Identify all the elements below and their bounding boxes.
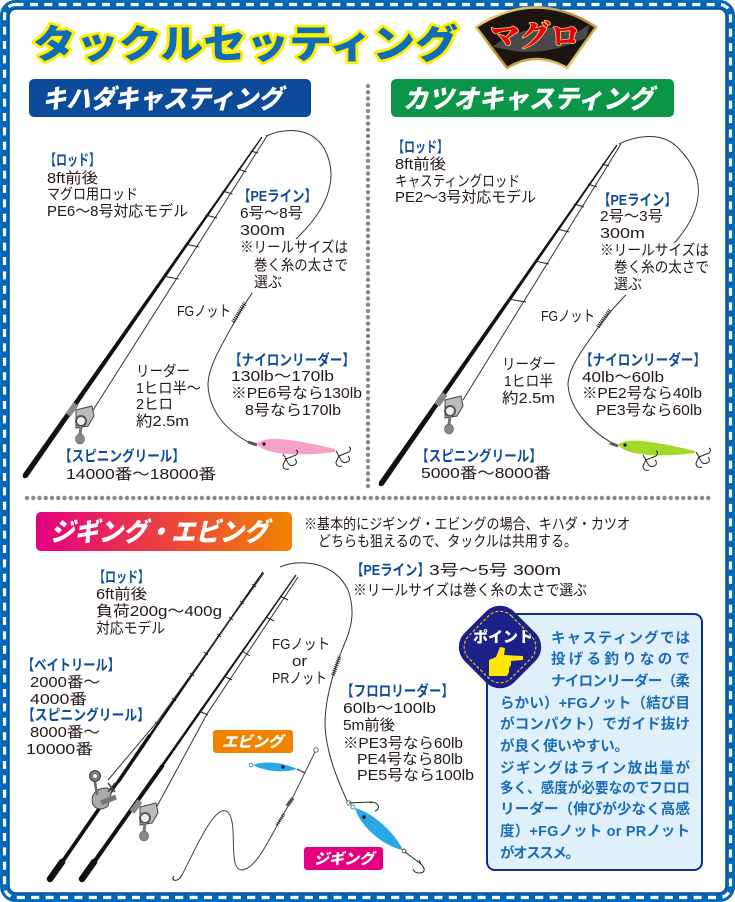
panel: point callout — [451, 598, 702, 870]
text: reels: 【ベイトリール】 — [22, 657, 120, 674]
text: rod — [45, 152, 188, 220]
text: PE line: 300m — [240, 222, 285, 239]
white mask behind PE text — [598, 243, 711, 295]
text: leader: 約2.5m — [136, 413, 189, 430]
text: PE line: 巻く糸の太さで — [254, 257, 348, 274]
text: PE line: 巻く糸の太さで — [614, 259, 709, 276]
lure: pink — [248, 439, 350, 469]
text: spinning reel — [59, 447, 216, 483]
text: rod: 【ロッド】 — [45, 152, 100, 169]
text: fluoro leader: ※PE3号なら60lb — [343, 735, 463, 752]
text: rod: マグロ用ロッド — [47, 186, 138, 203]
divider dotted — [27, 86, 712, 498]
tag: ebing: エビング — [221, 733, 287, 751]
lure: green — [610, 441, 710, 470]
text: rod: PE6〜8号対応モデル — [47, 202, 188, 220]
text: PE line: 3号〜5号 300m — [429, 562, 561, 579]
badge: maguro fan — [476, 8, 596, 68]
text: leader — [136, 363, 201, 430]
text: knot: or — [292, 653, 307, 670]
panel: katsuo casting — [379, 79, 711, 486]
text: point body: ナイロンリーダー（柔 — [551, 672, 690, 690]
text: rod: キャスティングロッド — [395, 173, 520, 190]
text: leader: 約2.5m — [502, 390, 555, 407]
text: nylon leader: 40lb〜60lb — [582, 369, 664, 386]
text: reels: 【スピニングリール】 — [22, 706, 150, 724]
text: rod: 対応モデル — [96, 619, 165, 637]
text: point body: 投げる釣りなので — [551, 650, 690, 668]
text: rod: 8ft前後 — [395, 156, 446, 173]
line and jigging lure — [280, 563, 424, 873]
text: PE line: 2号〜3号 — [600, 208, 663, 225]
text: spinning reel — [416, 447, 551, 482]
text: shared tackle note: どちらも狙えるので、タックルは共用する。 — [318, 533, 577, 550]
text: leader: 1ヒロ半 — [504, 373, 553, 390]
text: PE line — [238, 188, 348, 291]
text: point body: リーダー（伸びが少なく高感 — [500, 800, 691, 818]
icon: pointing hand — [489, 647, 523, 676]
tag: ebing — [213, 730, 293, 753]
panel: kihada casting — [23, 79, 362, 483]
text: nylon leader: ※PE2号なら40lb — [582, 385, 702, 402]
badge: point — [451, 598, 549, 696]
text: nylon leader — [580, 351, 706, 419]
text: point body: が良く使いやすい。 — [500, 737, 629, 755]
text: PE line: 選ぶ — [614, 276, 642, 293]
text: knot — [272, 636, 330, 687]
text: PE line: 【PEライン】 — [238, 188, 317, 205]
text: fluoro leader: 【フロロリーダー】 — [341, 682, 454, 700]
text: reels — [22, 657, 150, 758]
text: point body: がオススメ。 — [500, 844, 580, 862]
panel: jigging and ebing — [22, 512, 630, 881]
text: rod — [393, 139, 536, 206]
text: PE line: ※リールサイズは — [240, 239, 348, 256]
text: fluoro leader: PE5号なら100lb — [357, 767, 474, 784]
text: point body — [500, 629, 691, 862]
text: leader — [502, 356, 556, 407]
icon: bait reel — [90, 770, 116, 809]
text: nylon leader — [229, 351, 362, 419]
text: point body: がコンパクト）でガイド抜け — [500, 715, 690, 733]
text: point body: 度）+FGノット or PRノット — [500, 822, 690, 840]
text: PE line: 【PEライン】 — [598, 192, 677, 209]
text: spinning reel: 【スピニングリール】 — [416, 447, 542, 465]
text: rod: 8ft前後 — [47, 170, 98, 187]
text: PE line: ※リールサイズは巻く糸の太さで選ぶ — [353, 582, 587, 599]
text: knot: PRノット — [272, 670, 327, 687]
heading: jigging ebing: ジギング・エビング — [49, 517, 274, 547]
text: PE line: 【PEライン】 — [351, 562, 430, 579]
text: nylon leader: 【ナイロンリーダー】 — [580, 351, 706, 369]
text: FG knot: FGノット — [177, 303, 231, 320]
text: point body: 多く、感度が必要なのでフロロ — [500, 779, 690, 797]
text: shared tackle note — [304, 516, 630, 550]
text: reels: 2000番〜 — [30, 674, 100, 691]
text: PE line: 選ぶ — [254, 274, 282, 291]
text: nylon leader: 8号なら170lb — [245, 402, 341, 419]
title: タックルセッティング — [33, 23, 458, 67]
text: knot: FGノット — [272, 636, 330, 653]
text: PE line: 6号〜8号 — [240, 205, 303, 222]
text: reels: 4000番 — [30, 691, 87, 708]
text: rod: 6ft前後 — [96, 586, 147, 603]
text: nylon leader: 【ナイロンリーダー】 — [229, 351, 355, 369]
text: shared tackle note: ※基本的にジギング・エビングの場合、キハダ・カツオ — [304, 516, 630, 533]
text: rod: 【ロッド】 — [94, 569, 149, 586]
text: rod: 【ロッド】 — [393, 139, 448, 156]
text: nylon leader: 130lb〜170lb — [231, 368, 334, 385]
text: nylon leader: ※PE6号なら130lb — [231, 385, 362, 402]
rod and line — [23, 131, 350, 478]
heading: kihada casting: キハダキャスティング — [41, 84, 288, 114]
badge: maguro fan: マグロ — [490, 20, 580, 53]
text: spinning reel: 【スピニングリール】 — [59, 447, 185, 465]
text: FG knot: FGノット — [541, 308, 595, 325]
ebing lure and rig — [173, 748, 318, 880]
text: spinning reel: 5000番〜8000番 — [421, 465, 551, 482]
text: spinning reel: 14000番〜18000番 — [66, 466, 216, 483]
heading: katsuo casting: カツオキャスティング — [402, 84, 659, 114]
text: PE line — [598, 192, 709, 293]
text: fluoro leader: 5m前後 — [343, 717, 395, 734]
text: point body: らかい）+FGノット（結び目 — [500, 694, 690, 712]
text: reels: 8000番〜 — [30, 724, 100, 741]
tag: jigging: ジギング — [313, 850, 378, 868]
text: PE line: 300m — [600, 225, 645, 242]
text: leader: リーダー — [136, 363, 190, 380]
rods — [48, 572, 298, 881]
text: leader: 1ヒロ半〜 — [136, 380, 201, 397]
text: fluoro leader: 60lb〜100lb — [343, 700, 436, 717]
text: rod: PE2〜3号対応モデル — [395, 188, 536, 206]
text: point body: ジギングはライン放出量が — [500, 759, 690, 777]
text: leader: 2ヒロ — [136, 396, 173, 413]
text: nylon leader: PE3号なら60lb — [596, 402, 702, 419]
text: rod — [94, 569, 222, 637]
rod and line — [379, 136, 711, 486]
text: reels: 10000番 — [26, 741, 93, 758]
text: fluoro leader — [341, 682, 474, 784]
white mask behind PE text — [238, 239, 350, 293]
badge: point: ポイント — [473, 628, 533, 646]
text: fluoro leader: PE4号なら80lb — [357, 751, 463, 768]
text: point body: キャスティングでは — [551, 629, 690, 647]
text: rod: 負荷200g〜400g — [96, 603, 222, 620]
tag: jigging — [304, 847, 383, 870]
text: leader: リーダー — [502, 356, 556, 373]
text: PE line: ※リールサイズは — [600, 242, 709, 259]
text: PE line — [351, 562, 587, 599]
